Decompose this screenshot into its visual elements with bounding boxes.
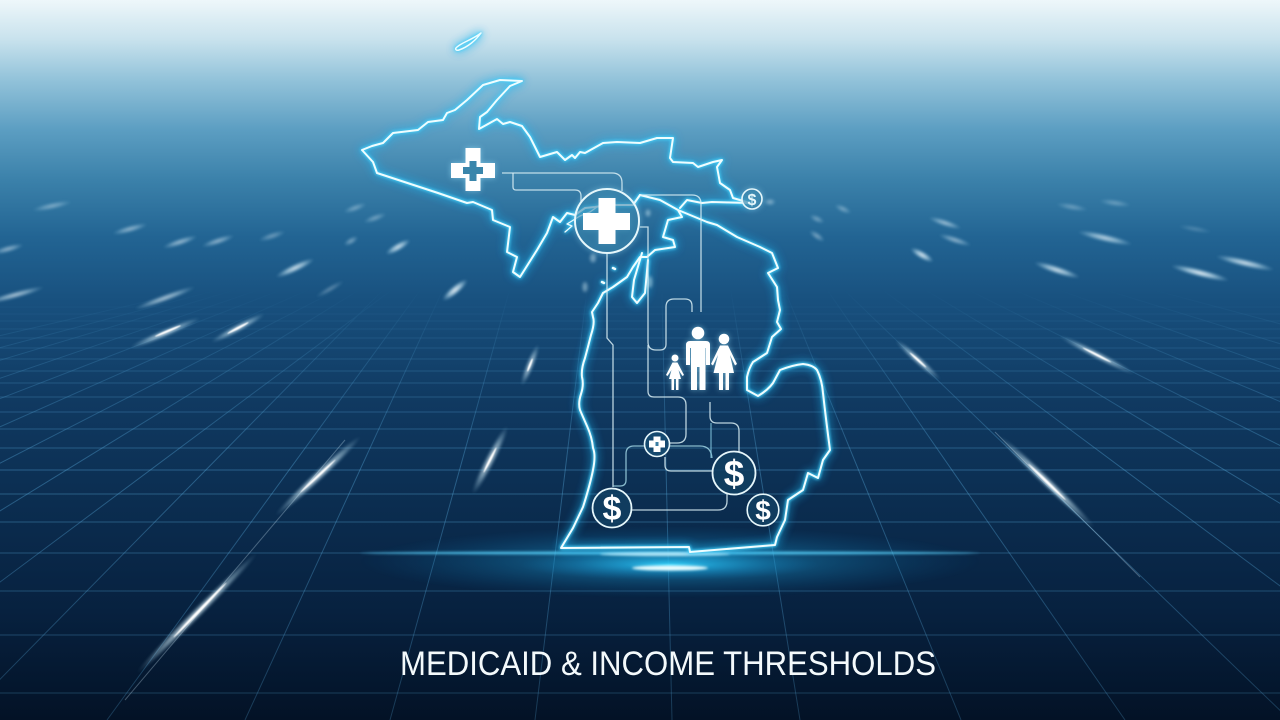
title: MEDICAID & INCOME THRESHOLDS [400, 645, 936, 683]
icon: small dollar coin at Sault Ste. Marie: $ [748, 192, 757, 209]
child figure [666, 354, 684, 390]
father figure [686, 327, 710, 390]
icon: dollar coin right [747, 494, 779, 526]
perspective floor grid [0, 306, 1280, 720]
Les Cheneaux shoreline strand [565, 207, 597, 232]
Beaver island specks [602, 268, 615, 283]
icon: dollar coin left [592, 488, 632, 528]
mother figure [711, 334, 737, 390]
icon: dollar coin center: $ [724, 453, 745, 494]
icon: dollar coin right: $ [755, 495, 771, 526]
upper peninsula outline [362, 80, 750, 277]
lower peninsula outline [561, 195, 830, 552]
floor glow under the map [360, 526, 980, 598]
circuit connector lines [502, 173, 739, 510]
icon: dollar coin center [712, 452, 756, 494]
Michigan map outline [362, 33, 830, 552]
icon: family of three [666, 327, 737, 390]
icon: large medical cross in circle [575, 189, 639, 253]
icon: medical cross upper peninsula [451, 148, 495, 191]
Grand Traverse bay loop [632, 253, 648, 303]
icon: small medical cross circle [644, 432, 670, 456]
soft light spots near the straits [582, 210, 652, 292]
icon: dollar coin left: $ [603, 490, 622, 528]
icon: small dollar coin at Sault Ste. Marie [742, 189, 762, 209]
Isle Royale outline [456, 33, 481, 50]
bright connecting rays [125, 432, 1140, 700]
light streaks on the floor [0, 197, 1275, 700]
